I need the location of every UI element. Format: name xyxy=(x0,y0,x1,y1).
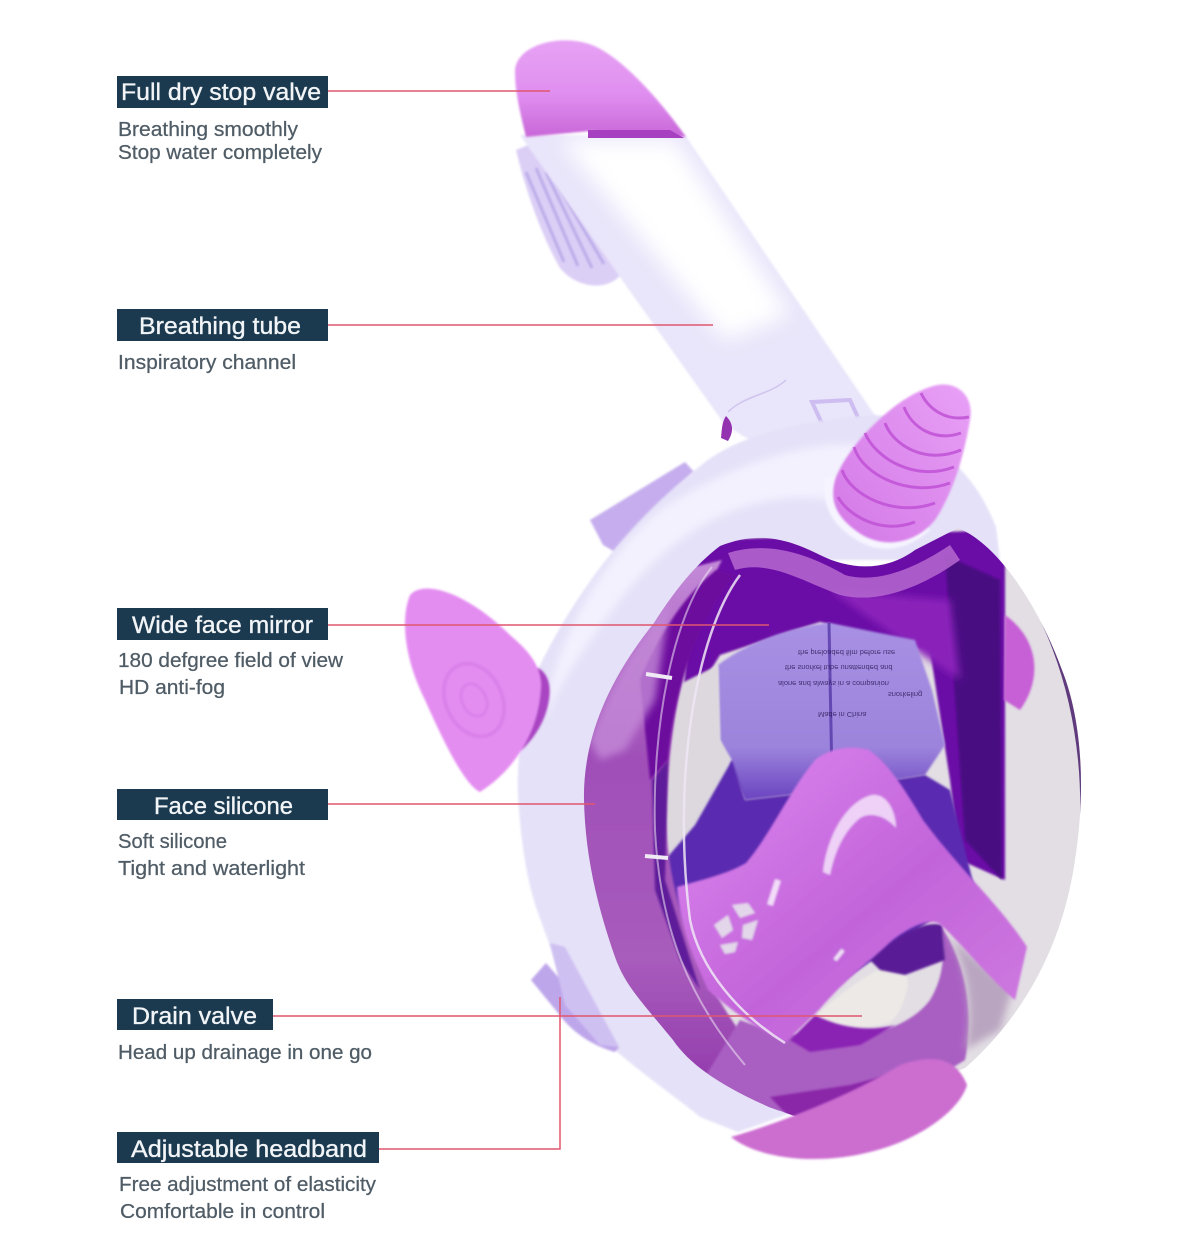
callout: adjustable headband: Free adjustment of elasticity xyxy=(119,1174,376,1196)
vent holes on nose cup xyxy=(714,903,758,954)
side strap buckle xyxy=(590,462,694,552)
breathing tube xyxy=(520,135,878,470)
callout: wide face mirror: HD anti-fog xyxy=(119,677,225,699)
callout: drain valve: Drain valve xyxy=(132,1003,257,1030)
printed warning text: the snorkel tube unattended and xyxy=(785,663,893,672)
callout: adjustable headband: Comfortable in control xyxy=(120,1201,325,1223)
callout: wide face mirror xyxy=(117,608,769,699)
callout: face silicone: Face silicone xyxy=(154,793,293,820)
bottom drain valve xyxy=(531,943,619,1052)
clear lens inner rim xyxy=(684,575,785,1043)
callout: breathing tube xyxy=(117,309,713,374)
face frame xyxy=(518,415,1000,1132)
adjustable headband tab xyxy=(731,1059,967,1159)
callout: adjustable headband: Adjustable headband xyxy=(131,1136,367,1163)
breathing hose lower loop xyxy=(700,925,969,1125)
lens interior xyxy=(584,528,1081,1116)
printed warning text: the preloaded film before use xyxy=(798,648,895,657)
callout: wide face mirror: Wide face mirror xyxy=(132,612,313,639)
unicorn horn xyxy=(824,385,971,549)
callout: breathing tube: Inspiratory channel xyxy=(118,352,296,374)
callout: breathing tube: Breathing tube xyxy=(139,313,301,340)
callout: drain valve xyxy=(117,999,862,1064)
violet lower chamber xyxy=(668,760,974,976)
dark purple cavity xyxy=(680,530,1005,880)
pink fin behind lens on right xyxy=(1004,615,1034,710)
dark lens edge on right xyxy=(1038,618,1081,814)
printed warning text: snorkeling xyxy=(888,690,922,699)
printed warning text: Made in China xyxy=(818,710,867,719)
lavender inner panel xyxy=(718,623,945,800)
clear wedge left of panel xyxy=(678,666,733,764)
callout: wide face mirror: 180 defgree field of view xyxy=(118,650,344,672)
grill on breathing tube xyxy=(516,140,624,286)
callout: full dry stop valve: Full dry stop valve xyxy=(121,79,321,106)
ear fin xyxy=(405,588,550,792)
callout: face silicone: Soft silicone xyxy=(118,831,227,853)
callout: adjustable headband xyxy=(117,997,560,1223)
full dry stop valve cap xyxy=(515,40,686,137)
left face silicone xyxy=(584,559,782,1112)
callout: full dry stop valve xyxy=(117,76,550,164)
white opening under nose cup xyxy=(818,970,907,1026)
callout: face silicone: Tight and waterlight xyxy=(118,858,305,880)
tube latch xyxy=(812,400,860,428)
callout: full dry stop valve: Breathing smoothly xyxy=(118,119,298,141)
callout: full dry stop valve: Stop water completely xyxy=(118,142,322,164)
callout: drain valve: Head up drainage in one go xyxy=(118,1042,372,1064)
callout: face silicone xyxy=(117,789,595,880)
mask product photo xyxy=(405,40,1100,1159)
printed warning text xyxy=(778,648,922,719)
printed warning text: alone and always in a companion xyxy=(778,679,889,688)
nose cup xyxy=(677,748,1027,1043)
